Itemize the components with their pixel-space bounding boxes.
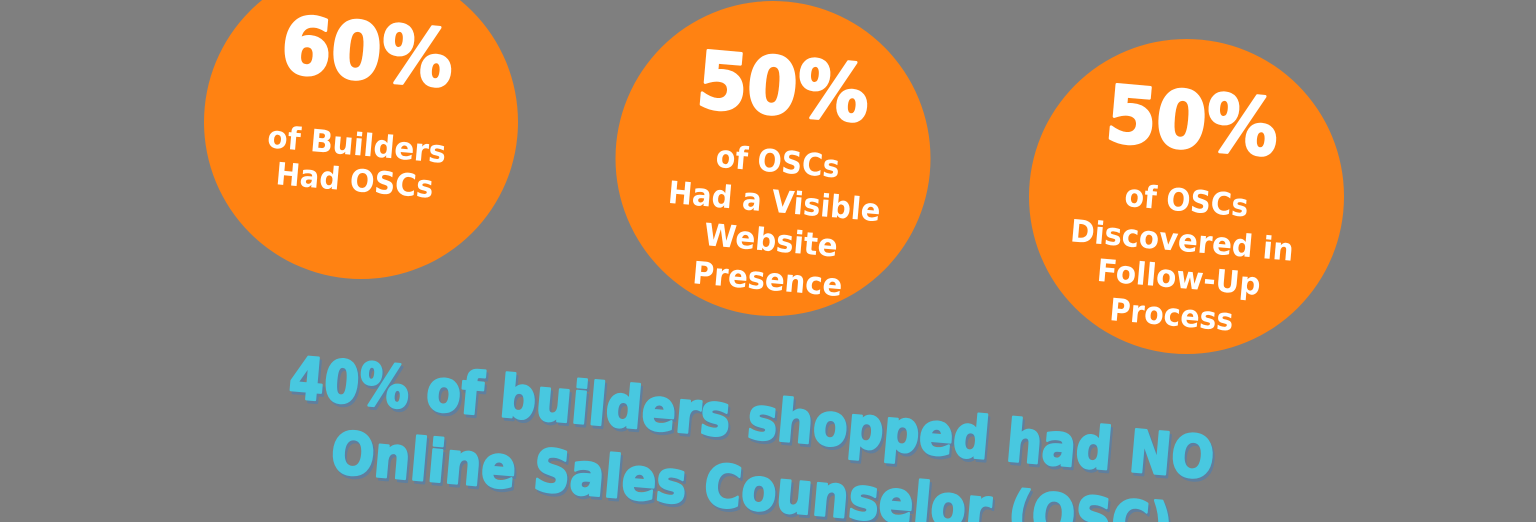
label: of Builders Had OSCs: Had OSCs [274,156,435,206]
panel: 50% visible website [616,1,930,316]
headline shadow: 40% of builders shopped had NO [289,347,1219,495]
label: of OSCs Had a Visible Website Presence [660,135,885,307]
panel: 60% of builders [204,0,518,279]
headline text: 40% of builders shopped had NO [287,344,1217,492]
panel: 50% follow-up process [1029,39,1344,354]
label: of Builders Had OSCs [263,119,448,207]
stat: 50% website: 50% [694,36,873,140]
label: of OSCs Discovered in Follow-Up Process: of OSCs [1123,178,1250,225]
label: of OSCs Had a Visible Website Presence: Had a Visible [667,175,882,229]
stat: 60%: 60% [278,1,457,105]
label: of OSCs Discovered in Follow-Up Process [1062,174,1299,343]
label: of OSCs Discovered in Follow-Up Process: Process [1108,292,1235,339]
label: of OSCs Had a Visible Website Presence: Website [703,217,839,265]
circle: 50% follow-up [1029,39,1344,354]
label: of OSCs Discovered in Follow-Up Process: Follow-Up [1096,253,1262,303]
circle: 50% website [616,1,930,316]
label: of Builders Had OSCs: of Builders [266,119,448,171]
label: of OSCs Had a Visible Website Presence: Presence [691,255,844,304]
stat: 50% follow-up: 50% [1103,70,1282,174]
circle: 60% [204,0,518,279]
headline: 40% of builders had no OSC [287,344,1219,522]
label: of OSCs Had a Visible Website Presence: of OSCs [714,139,841,186]
label: of OSCs Discovered in Follow-Up Process: Discovered in [1069,213,1295,269]
